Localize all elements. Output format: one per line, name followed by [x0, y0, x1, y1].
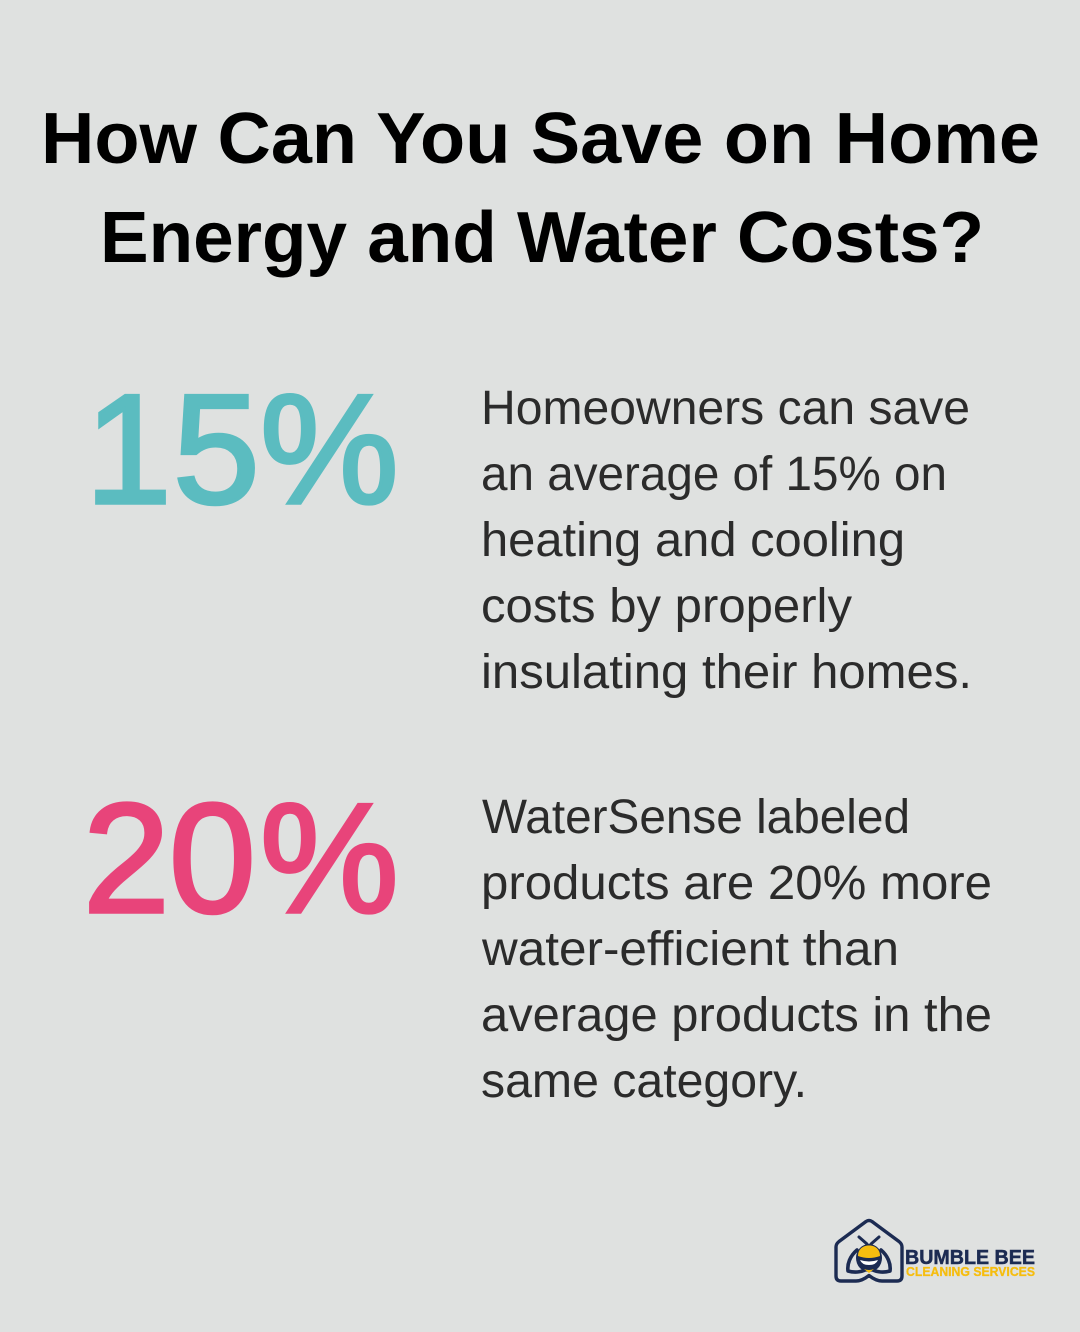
title: Energy and Water Costs?	[100, 198, 984, 278]
logo wordmark: BUMBLE BEE	[905, 1246, 1035, 1269]
title: How Can You Save on Home	[41, 99, 1040, 179]
text block: WaterSense products: water-efficient than	[481, 923, 899, 976]
text block: insulation savings: insulating their homes.	[481, 646, 972, 699]
text block: insulation savings	[481, 382, 972, 699]
text block: insulation savings: costs by properly	[481, 580, 852, 633]
statistic: 15%: 15%	[85, 363, 399, 537]
text block: WaterSense products	[481, 791, 992, 1108]
text block: insulation savings: an average of 15% on	[481, 448, 947, 501]
icon: house with bee	[836, 1220, 902, 1281]
logo: Bumble Bee Cleaning Services	[836, 1220, 1035, 1281]
text block: insulation savings: heating and cooling	[481, 514, 905, 567]
text block: WaterSense products: WaterSense labeled	[482, 791, 910, 844]
title	[41, 99, 1040, 278]
statistic: 20%: 20%	[83, 772, 399, 946]
logo tagline: CLEANING SERVICES	[906, 1265, 1035, 1279]
text block: WaterSense products: average products in the	[481, 989, 992, 1042]
text block: insulation savings: Homeowners can save	[481, 382, 970, 435]
text block: WaterSense products: products are 20% more	[481, 857, 992, 910]
text block: WaterSense products: same category.	[481, 1055, 807, 1108]
